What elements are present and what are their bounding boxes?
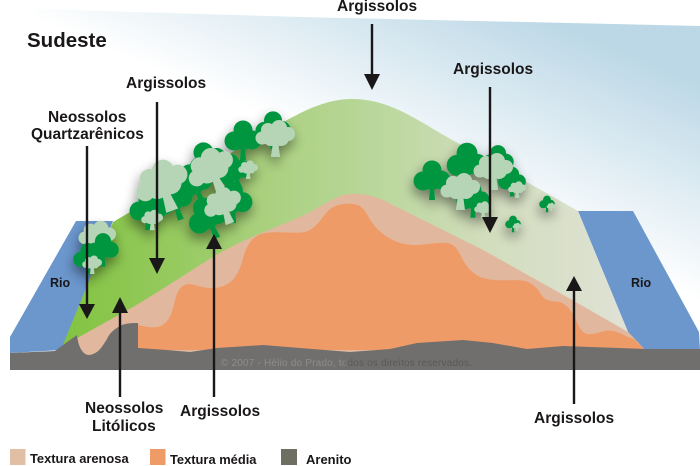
label: Rio right: Rio [631,276,652,290]
legend swatch: Textura média [150,449,166,465]
arrow: lower right Argissolos [566,276,582,404]
trees: left slope upper cluster [128,111,295,247]
label: Neossolos Litólicos: Neossolos [85,400,163,417]
bedrock: sandstone [10,323,700,370]
sky background [10,9,700,360]
small tree right [539,196,555,212]
label: lower right Argissolos: Argissolos [534,410,614,427]
soil layer: sandy texture [63,194,645,356]
left river [10,221,113,353]
arrow: top Argissolos [364,24,380,90]
label: left Argissolos: Argissolos [126,75,206,92]
copyright note: © 2007 - Hélio do Prado, todos os direitos reservados. [221,358,472,369]
arrow: right Argissolos [482,87,498,233]
label: Rio left: Rio [50,276,70,290]
hill: green surface [62,99,633,347]
arrow: Neossolos Quartzarênicos [79,146,95,319]
legend swatch: Textura arenosa [10,449,26,465]
label: Neossolos Quartzarênicos: Quartzarênicos [31,126,144,143]
arrow: left Argissolos [149,102,165,274]
legend [10,449,352,466]
label: right Argissolos: Argissolos [453,61,533,78]
arrow: Neossolos Litólicos [112,297,128,397]
small tree centre right [505,216,521,232]
label: Neossolos Litólicos: Litólicos [92,418,156,435]
trees: right slope cluster [414,143,526,218]
arrow: lower Argissolos [206,234,222,397]
trees: left riverbank cluster [73,221,119,275]
label: Neossolos Quartzarênicos: Neossolos [48,109,126,126]
soil layer: medium texture [138,204,645,350]
legend swatch: Arenito [281,449,297,465]
legend label: Textura arenosa: Textura arenosa [30,451,129,466]
label: lower Argissolos: Argissolos [180,403,260,420]
title: Sudeste [27,29,107,52]
right river [578,211,700,350]
